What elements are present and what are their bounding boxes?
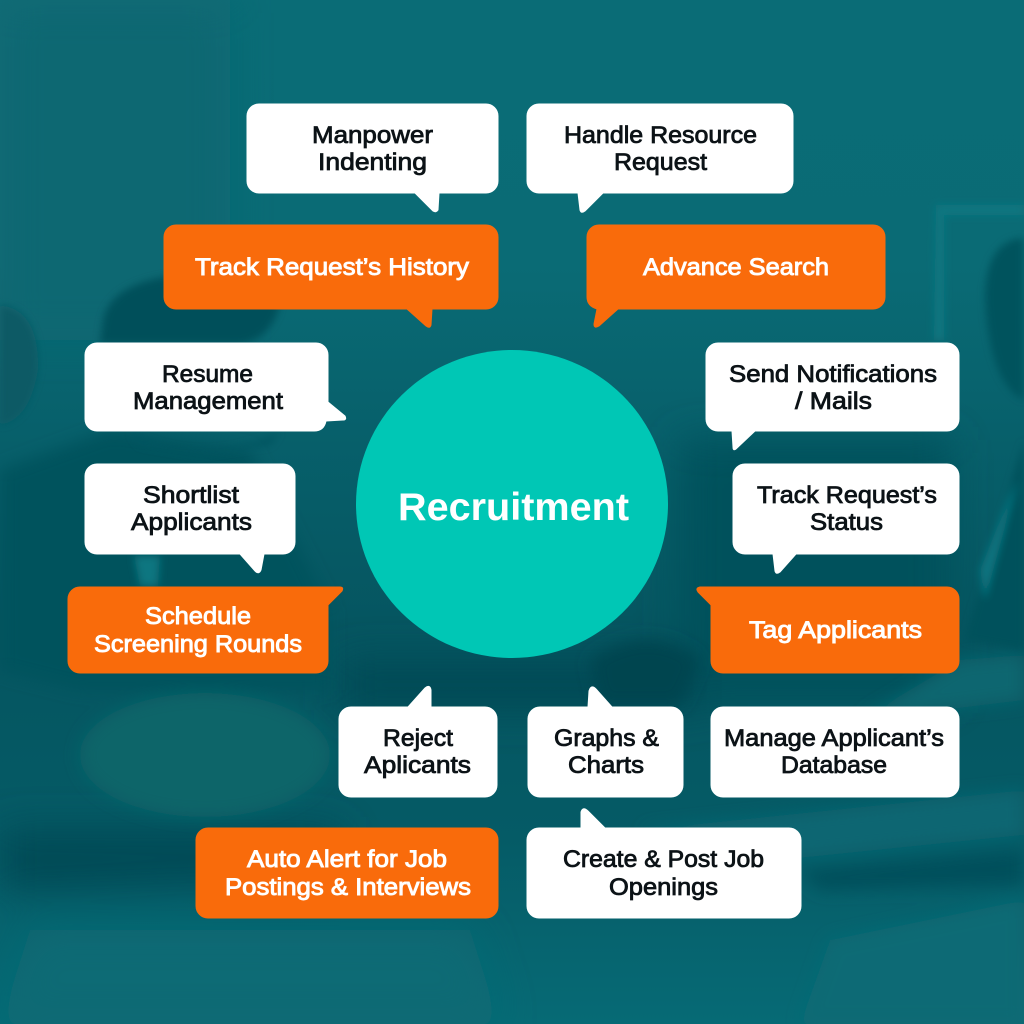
bubble: Send Notifications / Mails: / Mails [795,388,872,415]
bubble: Graphs and Charts: Charts [568,752,644,779]
bubble: Graphs and Charts: Graphs & [554,725,659,752]
bubble: Manage Applicant's Database: Database [781,752,887,779]
bubble: Schedule Screening Rounds [68,587,343,673]
bubble: Track Request's History [164,225,498,327]
bubble: Track Request's History: Track Request’s History [195,254,469,281]
bubble: Auto Alert for Job Postings and Interviews: Postings & Interviews [225,874,471,901]
bubble: Schedule Screening Rounds: Schedule [145,603,251,630]
bubble: Resume Management: Resume [162,361,253,388]
bubble: Tag Applicants: Tag Applicants [749,617,922,644]
bubble: Track Request's Status: Track Request’s [757,482,937,509]
bubble: Reject Aplicants [339,686,497,797]
bubble: Auto Alert for Job Postings and Interviews [196,828,498,918]
bubble: Send Notifications / Mails: Send Notifications [729,361,937,388]
bubble: Graphs and Charts [528,687,683,797]
bubble: Resume Management [85,343,346,431]
bubble: Advance Search [587,225,885,327]
bubble: Manpower Indenting [247,104,498,212]
bubble: Track Request's Status: Status [810,509,883,536]
central circle: Recruitment [356,350,668,658]
bubble: Manpower Indenting: Indenting [318,149,427,176]
bubble: Shortlist Applicants [85,464,295,573]
bubble: Schedule Screening Rounds: Screening Rounds [94,631,302,658]
bubble: Handle Resource Request: Handle Resource [564,122,757,149]
bubble: Handle Resource Request: Request [614,149,707,176]
bubble: Create and Post Job Openings [527,809,801,918]
bubble: Auto Alert for Job Postings and Interviews: Auto Alert for Job [247,846,447,873]
bubble: Manage Applicant's Database: Manage Applicant’s [724,725,944,752]
bubble: Tag Applicants [697,587,959,673]
bubble: Advance Search: Advance Search [643,254,829,281]
bubble: Shortlist Applicants: Applicants [131,509,252,536]
bubble: Handle Resource Request [527,104,793,212]
bubble: Shortlist Applicants: Shortlist [143,482,239,509]
bubble: Resume Management: Management [133,388,283,415]
bubble: Send Notifications / Mails [706,343,959,450]
bubble: Reject Aplicants: Aplicants [364,752,471,779]
bubble: Create and Post Job Openings: Create & Post Job [563,846,764,873]
bubble: Track Request's Status [733,464,959,573]
bubble: Reject Aplicants: Reject [383,725,453,752]
bubble: Manpower Indenting: Manpower [312,122,433,149]
bubble: Create and Post Job Openings: Openings [609,874,718,901]
central circle: Recruitment: Recruitment [398,486,629,529]
bubble: Manage Applicant's Database [711,707,959,797]
